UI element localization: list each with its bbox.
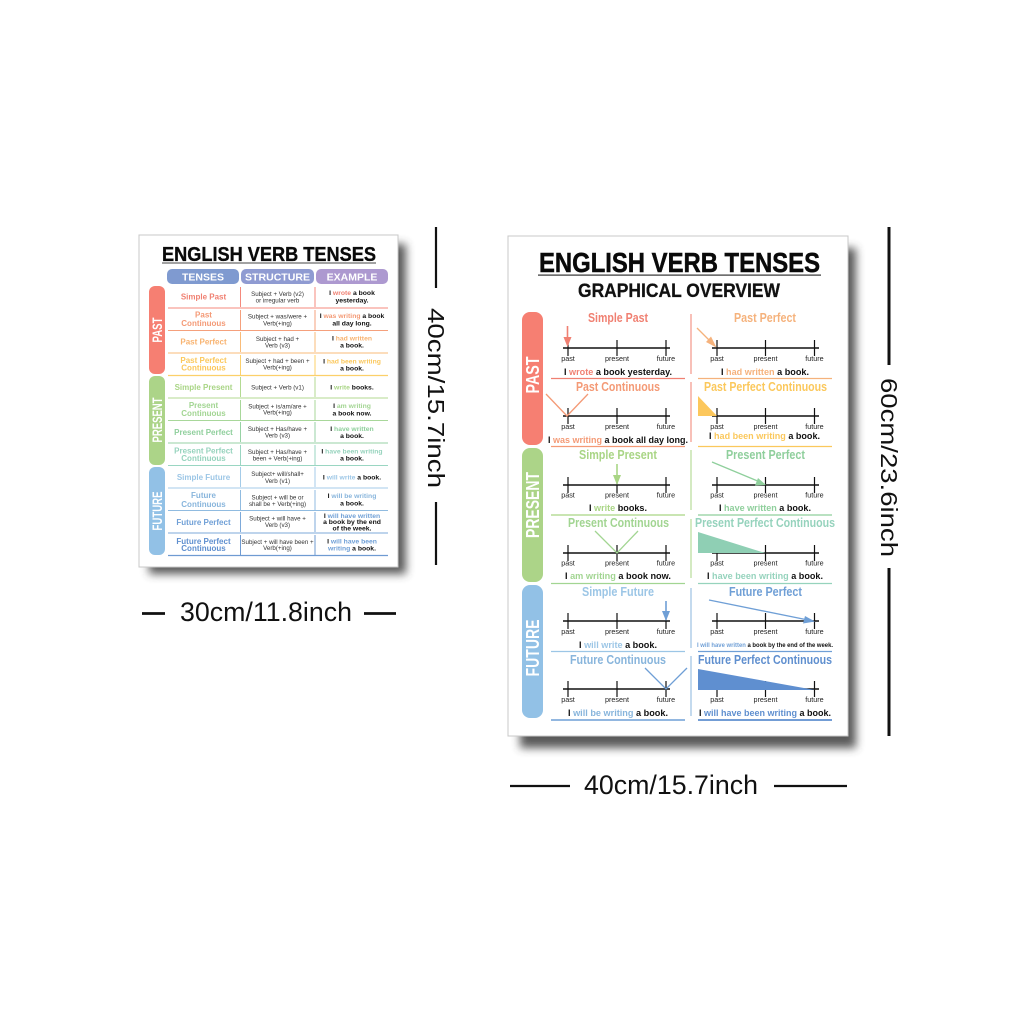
row: present perfect: Verb (v3) bbox=[265, 432, 290, 440]
row: present perfect bbox=[168, 422, 388, 443]
row: present perfect: I have written bbox=[330, 426, 374, 433]
panel: present perfect bbox=[698, 448, 832, 515]
panel: past perfect: future bbox=[805, 354, 824, 363]
panel: simple present: past bbox=[561, 490, 575, 500]
row: future perfect continuous: writing a book. bbox=[327, 546, 376, 552]
side label: present: PRESENT bbox=[523, 472, 543, 538]
panel: future continuous: Future Continuous bbox=[570, 653, 666, 667]
shadow: small poster bbox=[149, 244, 406, 574]
panel: past continuous bbox=[546, 380, 688, 446]
panel: simple future: future bbox=[657, 627, 675, 636]
arrow bbox=[709, 600, 808, 620]
side label: past: PAST bbox=[523, 356, 543, 394]
panel: future perfect continuous: future bbox=[805, 695, 824, 704]
row: future perfect: of the week. bbox=[333, 526, 372, 532]
panel: present perfect: I have written a book. bbox=[719, 503, 811, 514]
row: past perfect continuous: Past Perfect bbox=[180, 356, 227, 365]
panel: past continuous: future bbox=[657, 422, 675, 431]
row: simple future bbox=[168, 467, 388, 488]
row: simple past: or irregular verb bbox=[256, 298, 300, 304]
panel: present perfect continuous: Present Perfect Continuous bbox=[695, 516, 835, 530]
panel: future perfect: I will have written a book by the end of the week. bbox=[697, 642, 833, 649]
arrow bbox=[712, 462, 760, 482]
panel: past perfect continuous: Past Perfect Continuous bbox=[704, 380, 827, 394]
row: past perfect continuous: Subject + had + been + bbox=[245, 358, 310, 365]
arrow bbox=[665, 601, 667, 614]
wedge bbox=[698, 396, 717, 416]
row: simple past: Simple Past bbox=[181, 292, 227, 302]
row: present perfect: Present Perfect bbox=[174, 428, 233, 437]
panel: present perfect continuous: I have been writing a book. bbox=[707, 571, 823, 582]
row: present perfect continuous: been + Verb(+ing) bbox=[253, 456, 302, 462]
panel: future continuous: past bbox=[561, 695, 575, 704]
row: simple present bbox=[168, 377, 388, 398]
row: future perfect: Future Perfect bbox=[176, 518, 231, 527]
panel: simple future: present bbox=[605, 627, 629, 636]
row: past continuous: Past bbox=[195, 310, 212, 320]
row: past perfect continuous: Continuous bbox=[181, 364, 226, 372]
row: present continuous bbox=[168, 400, 388, 420]
row: future continuous: Future bbox=[191, 491, 216, 500]
row: future perfect continuous bbox=[168, 535, 388, 556]
row: present continuous: I am writing bbox=[333, 403, 371, 410]
panel: simple present: I write books. bbox=[589, 503, 647, 514]
panel: future continuous: I will be writing a book. bbox=[568, 708, 668, 719]
row: future perfect: a book by the end bbox=[323, 519, 381, 526]
row: simple past: yesterday. bbox=[335, 298, 369, 304]
row: future perfect: I will have written bbox=[324, 513, 380, 520]
arrow bbox=[645, 668, 687, 689]
side label: past: PAST bbox=[150, 317, 165, 342]
arrow bbox=[566, 326, 568, 340]
row: future continuous: shall be + Verb(+ing) bbox=[249, 501, 306, 508]
panel: past perfect: present bbox=[754, 354, 777, 363]
panel: future perfect continuous bbox=[698, 653, 832, 720]
row: future perfect continuous: Future Perfect bbox=[176, 537, 231, 546]
panel: past perfect: Past Perfect bbox=[734, 311, 797, 325]
row: simple present: I write books. bbox=[330, 384, 374, 392]
row: past perfect continuous: Verb(+ing) bbox=[263, 364, 292, 372]
row: present perfect continuous bbox=[168, 445, 388, 466]
side label: present bbox=[522, 448, 543, 582]
poster: graphical overview bbox=[508, 236, 848, 736]
panel: present perfect: future bbox=[805, 490, 824, 500]
title: ENGLISH VERB TENSES bbox=[162, 243, 376, 266]
row: simple past bbox=[168, 287, 388, 308]
panel: past continuous: past bbox=[561, 422, 575, 431]
table headers: EXAMPLE bbox=[327, 272, 377, 284]
panel: past perfect continuous: present bbox=[754, 422, 777, 431]
table headers: TENSES bbox=[182, 272, 224, 284]
row: future perfect continuous: Verb(+ing) bbox=[263, 545, 292, 552]
row: past continuous: Continuous bbox=[181, 319, 226, 328]
row: simple present: Subject + Verb (v1) bbox=[251, 384, 304, 392]
row: simple future: Verb (v1) bbox=[265, 478, 290, 485]
side label: present: PRESENT bbox=[150, 397, 165, 442]
panel: simple future bbox=[551, 585, 685, 652]
row: future perfect continuous: I will have been bbox=[327, 538, 377, 546]
row: simple future: Subject+ will/shall+ bbox=[251, 471, 304, 478]
panel: present perfect continuous: present bbox=[754, 558, 777, 568]
row: past perfect: Verb (v3) bbox=[265, 342, 290, 350]
side label: future bbox=[522, 585, 543, 718]
row: present continuous: Continuous bbox=[181, 409, 226, 418]
panel: future perfect: future bbox=[805, 627, 824, 636]
row: past perfect bbox=[168, 332, 388, 353]
panel: future perfect continuous: I will have been writing a book. bbox=[699, 708, 831, 719]
side label: future bbox=[149, 467, 165, 555]
arrow bbox=[697, 328, 712, 343]
panel: future perfect continuous: present bbox=[754, 695, 777, 704]
row: future perfect: Subject + will have + bbox=[249, 516, 306, 522]
panel: future continuous: present bbox=[605, 695, 629, 704]
table headers bbox=[167, 269, 388, 284]
row: future perfect bbox=[168, 512, 388, 533]
panel: past continuous: Past Continuous bbox=[576, 380, 660, 394]
panel: future perfect: present bbox=[754, 627, 777, 636]
row: simple future: Simple Future bbox=[177, 473, 231, 482]
panel: past perfect continuous: I had been writing a book. bbox=[709, 431, 820, 442]
panel: past perfect continuous: future bbox=[805, 422, 824, 431]
row: present perfect: a book. bbox=[340, 433, 364, 440]
wedge bbox=[698, 669, 815, 690]
panel: future continuous: future bbox=[657, 695, 675, 704]
panel: present continuous bbox=[551, 516, 685, 584]
panel: future perfect: past bbox=[710, 627, 724, 636]
side label: past bbox=[522, 312, 543, 445]
row: present perfect continuous: Continuous bbox=[181, 454, 226, 463]
row: past perfect: I had written bbox=[332, 336, 372, 342]
panel: present continuous: past bbox=[561, 558, 575, 568]
panel: past perfect: I had written a book. bbox=[721, 367, 809, 378]
panel: present perfect continuous: past bbox=[710, 558, 724, 568]
arrow bbox=[546, 394, 588, 416]
panel: present perfect: Present Perfect bbox=[726, 448, 806, 462]
row: present perfect continuous: I have been writing bbox=[321, 448, 383, 456]
panel: simple past bbox=[551, 311, 685, 378]
poster: verb tense table bbox=[139, 235, 398, 567]
panel: past perfect continuous: past bbox=[710, 422, 724, 431]
row: past continuous bbox=[168, 310, 388, 330]
row: simple present: Simple Present bbox=[175, 383, 233, 392]
panel: future perfect: Future Perfect bbox=[729, 585, 803, 599]
panel: simple future: I will write a book. bbox=[579, 640, 657, 651]
subtitle: GRAPHICAL OVERVIEW bbox=[578, 280, 781, 302]
row: future continuous: Continuous bbox=[181, 500, 226, 509]
row: present perfect: Subject + Has/have + bbox=[248, 426, 307, 433]
side label: past bbox=[149, 286, 165, 374]
row: simple future: I will write a book. bbox=[323, 474, 381, 482]
row: future continuous: a book. bbox=[340, 500, 364, 508]
dimension: small poster width: 30cm/11.8inch bbox=[180, 597, 352, 627]
panel: simple present: future bbox=[657, 490, 675, 500]
row: past perfect: a book. bbox=[340, 342, 364, 350]
panel: future continuous bbox=[551, 653, 687, 720]
table headers: STRUCTURE bbox=[245, 272, 310, 284]
row: past perfect: Subject + had + bbox=[256, 336, 300, 343]
panel: simple future: past bbox=[561, 627, 575, 636]
row: present perfect continuous: Subject + Has/have + bbox=[248, 449, 307, 456]
panel: future perfect continuous: Future Perfect Continuous bbox=[698, 653, 832, 667]
panel: past continuous: I was writing a book all day long. bbox=[548, 435, 688, 446]
side label: future: FUTURE bbox=[523, 620, 543, 676]
dimension: small poster height: 40cm/15.7inch bbox=[423, 308, 449, 488]
row: future continuous: Subject + will be or bbox=[251, 494, 304, 502]
panel: present continuous: present bbox=[605, 558, 629, 568]
panel: present continuous: I am writing a book now. bbox=[565, 571, 671, 582]
row: present perfect continuous: Present Perfect bbox=[174, 446, 233, 456]
wedge bbox=[698, 532, 765, 553]
panel: future perfect bbox=[697, 585, 833, 652]
arrow bbox=[595, 531, 638, 553]
row: past perfect continuous bbox=[168, 355, 388, 376]
row: past continuous: Subject + was/were + bbox=[248, 314, 307, 320]
row: future perfect: Verb (v3) bbox=[265, 522, 290, 529]
panel: simple present: Simple Present bbox=[579, 448, 658, 462]
panel: simple past: future bbox=[657, 354, 675, 363]
panel: simple past: I wrote a book yesterday. bbox=[564, 367, 672, 378]
dimension: large poster height: 60cm/23.6inch bbox=[876, 378, 902, 557]
panel: simple present: present bbox=[605, 490, 629, 500]
panel: simple future: Simple Future bbox=[582, 585, 654, 599]
panel: present continuous: future bbox=[657, 558, 675, 568]
panel: past perfect bbox=[697, 311, 832, 378]
panel: past continuous: present bbox=[605, 422, 629, 431]
row: past continuous: Verb(+ing) bbox=[263, 320, 292, 328]
row: past continuous: I was writing a book bbox=[320, 313, 385, 320]
row: present perfect continuous: a book. bbox=[340, 456, 364, 462]
panel: present perfect: present bbox=[754, 490, 777, 500]
row: present continuous: Verb(+ing) bbox=[263, 410, 292, 416]
row: past continuous: all day long. bbox=[332, 320, 372, 328]
row: simple past: I wrote a book bbox=[329, 290, 375, 297]
row: simple past: Subject + Verb (v2) bbox=[251, 291, 304, 298]
arrow bbox=[616, 464, 618, 478]
panel: simple past: present bbox=[605, 354, 629, 363]
row: future continuous: I will be writing bbox=[328, 493, 376, 500]
row: past perfect continuous: I had been writing bbox=[323, 358, 381, 366]
panel: past perfect: past bbox=[710, 354, 724, 363]
row: present continuous: Subject + is/am/are + bbox=[248, 404, 307, 410]
row: present continuous: Present bbox=[189, 401, 219, 410]
row: past perfect: Past Perfect bbox=[180, 338, 227, 346]
row: future continuous bbox=[168, 490, 388, 510]
panel: past perfect continuous bbox=[698, 380, 832, 446]
panel: present perfect continuous bbox=[695, 516, 835, 584]
side label: future: FUTURE bbox=[150, 492, 165, 530]
panel: present perfect: past bbox=[710, 490, 724, 500]
panel: present continuous: Present Continuous bbox=[568, 516, 669, 530]
panel: simple past: Simple Past bbox=[588, 311, 649, 325]
row: present continuous: a book now. bbox=[332, 410, 372, 418]
row: future perfect continuous: Subject + will have been + bbox=[241, 539, 314, 546]
panel: simple present bbox=[551, 448, 685, 515]
dimension: large poster width: 40cm/15.7inch bbox=[584, 770, 758, 800]
shadow: large poster bbox=[520, 248, 856, 748]
row: future perfect continuous: Continuous bbox=[181, 544, 226, 553]
row: past perfect continuous: a book. bbox=[340, 366, 364, 372]
title: ENGLISH VERB TENSES bbox=[539, 247, 820, 278]
panel: present perfect continuous: future bbox=[805, 558, 824, 568]
side label: present bbox=[149, 376, 165, 465]
panel: simple past: past bbox=[561, 354, 575, 363]
panel: future perfect continuous: past bbox=[710, 695, 724, 704]
